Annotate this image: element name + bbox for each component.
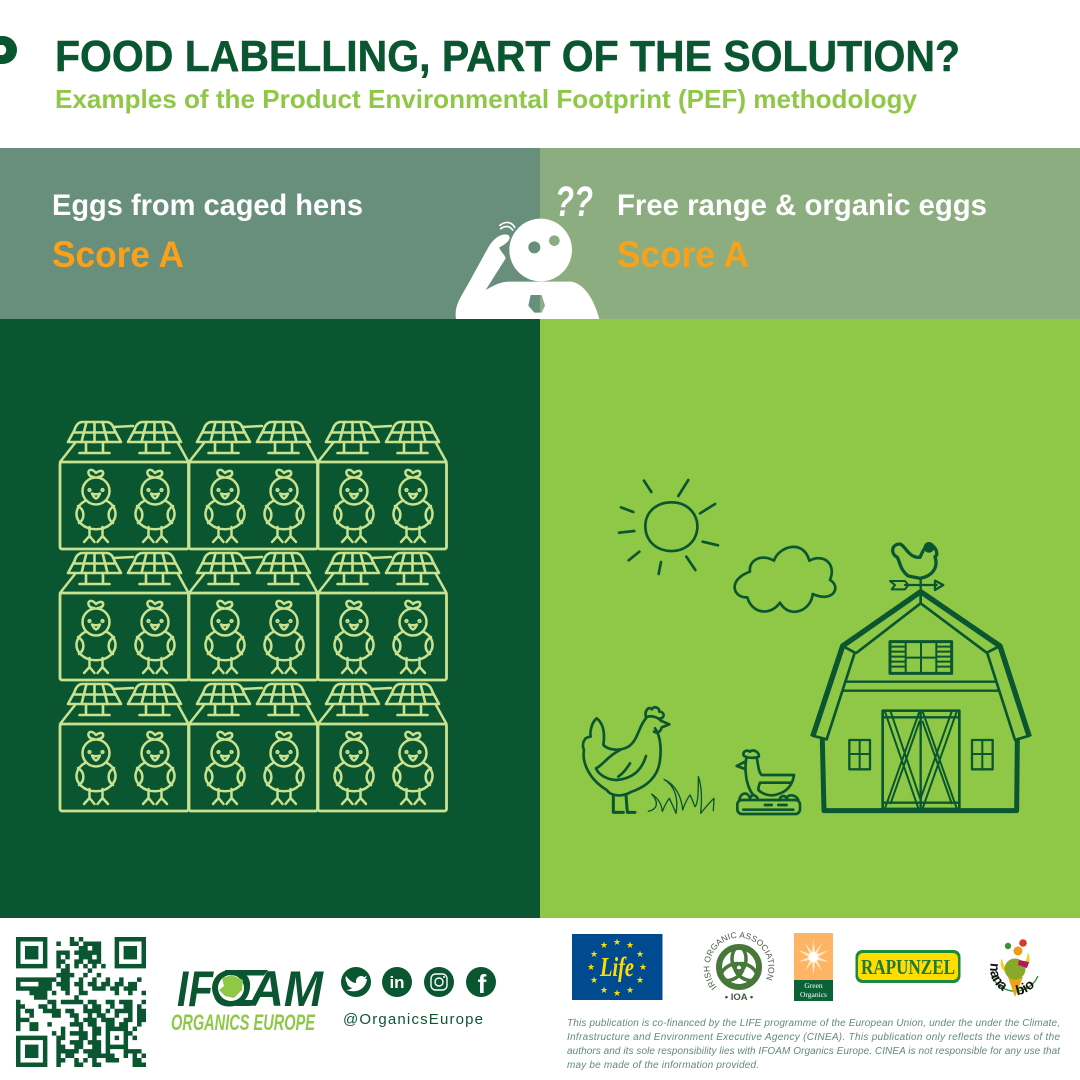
icon: hen xyxy=(583,707,669,812)
panel: caged hens xyxy=(0,319,540,918)
icon: sun xyxy=(619,480,718,574)
logo: LIFE: ★ xyxy=(613,937,621,947)
icon: facebook: f xyxy=(478,969,487,999)
icon: linkedin: in xyxy=(389,973,405,992)
panel: caged header xyxy=(0,148,540,319)
logo: IFOAM Organics Europe: O xyxy=(211,961,251,1017)
logo: LIFE: ★ xyxy=(590,975,598,985)
logo: nana bio: bio xyxy=(1016,982,1034,996)
logo: Rapunzel: RAPUNZEL xyxy=(861,955,955,979)
logo: LIFE: ★ xyxy=(626,985,634,995)
logo: Green Organics: Green xyxy=(804,981,823,990)
free range score: Score A xyxy=(617,234,749,275)
logo: LIFE: ★ xyxy=(587,962,595,972)
cropped logo fragment xyxy=(0,36,17,64)
logo: Irish Organic Association: • IOA • xyxy=(725,992,754,1003)
icon: weather vane xyxy=(890,542,943,592)
logo: IFOAM Organics Europe: IF xyxy=(177,961,214,1017)
social icons xyxy=(341,967,496,999)
disclaimer text: authors and its sole responsibility lies with IFOAM Organics Europe. CINEA is not responsible for any use that xyxy=(567,1046,1061,1057)
illustration: stacked cages xyxy=(60,422,446,811)
disclaimer text: This publication is co-financed by the LIFE programme of the European Union, under the under the Climate, xyxy=(567,1018,1060,1029)
icon: twitter xyxy=(341,967,371,997)
question marks: ?? xyxy=(555,178,593,226)
disclaimer text xyxy=(567,1018,1061,1071)
logo: Irish Organic Association: IRISH ORGANIC ASSOCIATION xyxy=(704,932,774,990)
logo: IFOAM Organics Europe: AM xyxy=(248,961,324,1017)
logo: Green Organics: Organics xyxy=(800,990,827,999)
logo: LIFE: Life xyxy=(599,952,634,982)
logo: LIFE: ★ xyxy=(639,962,647,972)
icon: thinking person xyxy=(456,178,599,319)
logo: nana bio: nana xyxy=(990,964,1006,992)
icon: cloud xyxy=(735,547,835,612)
logo: LIFE: ★ xyxy=(613,988,621,998)
logo: LIFE xyxy=(572,934,662,1000)
logo: LIFE: ★ xyxy=(636,975,644,985)
social handle: @OrganicsEurope xyxy=(343,1011,483,1028)
logo: LIFE: ★ xyxy=(600,985,608,995)
icon: grass xyxy=(648,777,714,813)
panel: free range header xyxy=(540,148,1080,319)
logo: Rapunzel xyxy=(856,950,960,983)
icon: instagram xyxy=(424,967,454,997)
icon: nesting hen xyxy=(737,750,800,814)
logo: IFOAM Organics Europe: ORGANICS EUROPE xyxy=(171,1010,316,1035)
caged score: Score A xyxy=(52,234,184,275)
free range heading: Free range & organic eggs xyxy=(617,189,987,222)
disclaimer text: may be made of the information provided. xyxy=(567,1060,759,1071)
logo: LIFE: ★ xyxy=(600,940,608,950)
caged heading: Eggs from caged hens xyxy=(52,189,363,222)
title: FOOD LABELLING, PART OF THE SOLUTION? xyxy=(55,32,960,81)
logo: LIFE: ★ xyxy=(636,949,644,959)
logo: Green Organics xyxy=(794,933,833,1001)
subtitle: Examples of the Product Environmental Footprint (PEF) methodology xyxy=(55,84,918,114)
logo: LIFE: ★ xyxy=(626,940,634,950)
logo: LIFE: ★ xyxy=(590,949,598,959)
panel: free range hens xyxy=(540,319,1080,918)
icon: facebook xyxy=(466,967,496,999)
icon: linkedin xyxy=(382,967,412,997)
logo: nana bio xyxy=(990,939,1039,997)
logo: IFOAM Organics Europe xyxy=(171,961,324,1035)
QR code xyxy=(16,939,146,1065)
illustration: farm scene xyxy=(583,480,1029,814)
disclaimer text: Infrastructure and Environment Executive Agency (CINEA). This publication only reflects the views of the xyxy=(567,1032,1060,1043)
icon: barn xyxy=(813,592,1029,811)
